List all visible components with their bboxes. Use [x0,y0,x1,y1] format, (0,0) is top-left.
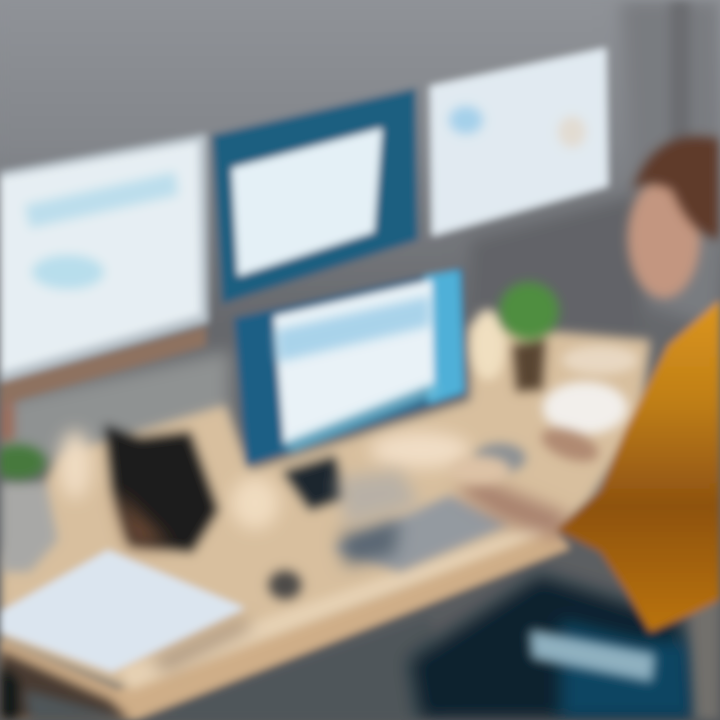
sweater [556,300,720,632]
forearm [455,478,570,540]
screen blue mark [449,106,483,134]
notebook [543,382,627,434]
mouse [474,443,526,473]
paper on desk [0,550,245,672]
keyboard [332,495,510,572]
screen blue block [32,255,104,289]
chair [690,575,720,720]
leaves [0,444,46,480]
top right monitor [430,48,608,236]
person [410,136,720,720]
jeans highlight [530,630,655,682]
desk surface [0,310,650,690]
dark object [105,425,218,552]
monitor base bar [0,326,206,406]
small object on desk [268,570,302,600]
neck and face [628,178,700,298]
left monitor [0,134,208,442]
desk front edge [0,525,570,720]
screen header band [25,172,178,228]
pot [0,482,58,572]
screen warm mark [558,116,586,148]
left plant [0,444,58,572]
under-desk shadow [145,615,445,720]
leaves [499,282,559,340]
desk device [338,470,420,525]
monitor stand [283,456,345,510]
left dark corner [0,650,130,720]
plant on desk [499,282,559,392]
pot [512,338,546,392]
hair [632,136,720,240]
top center monitor [212,88,418,304]
hand [537,422,603,468]
paper shadow [150,618,252,672]
screen header band [276,296,430,362]
center monitor [234,268,466,466]
jeans [410,575,695,720]
